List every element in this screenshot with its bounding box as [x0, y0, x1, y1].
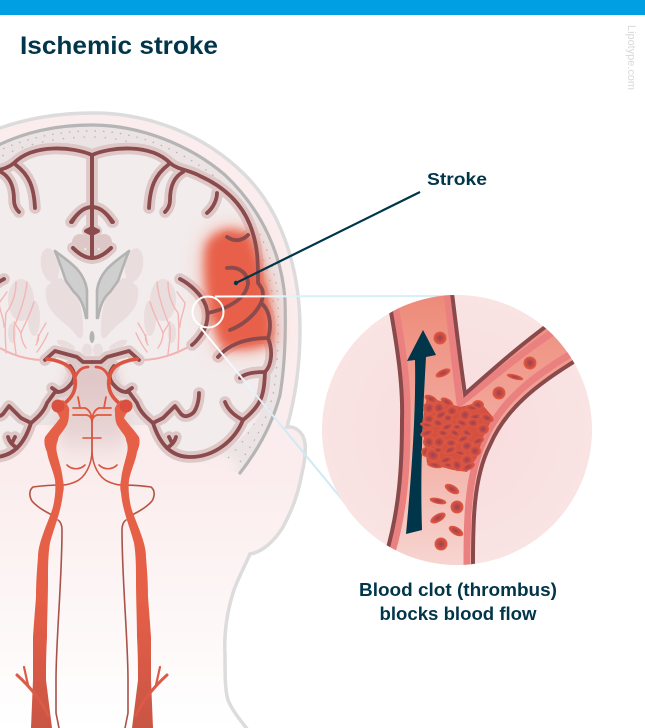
capillaries: [0, 282, 185, 355]
zoom connector lines: [200, 296, 450, 503]
stroke pointer: [234, 192, 420, 285]
dura speckle dots: [0, 131, 278, 462]
caption: blocks blood flow: [380, 604, 538, 624]
caption: Blood clot (thrombus): [359, 580, 557, 600]
head silhouette: [0, 113, 305, 728]
zoom circle on brain: [192, 296, 224, 328]
arc of lower brain: [0, 345, 192, 360]
basal ganglia and deep nuclei: [8, 247, 176, 356]
ventricles: [55, 251, 129, 343]
blood cells: [429, 332, 536, 550]
stroke label: Stroke: [427, 169, 487, 189]
title: Ischemic stroke: [20, 32, 218, 60]
brain tissue: [0, 146, 274, 461]
left carotid artery: [17, 400, 69, 728]
skull and dura: [0, 125, 285, 478]
blood clot: [419, 393, 495, 473]
detail disc: blood vessel: [322, 285, 592, 570]
stroke lesion: [199, 225, 278, 355]
blood flow arrow: [406, 330, 436, 534]
right carotid artery: [115, 400, 167, 728]
brainstem shading: [56, 362, 128, 475]
top bar: [0, 0, 645, 15]
gyri lines: [0, 148, 271, 457]
caption: [359, 580, 557, 624]
gyri halo: [0, 148, 271, 457]
intracranial arteries: [30, 359, 154, 728]
vessel lumen: [386, 285, 580, 570]
watermark: Lipotype.com: [625, 25, 637, 90]
vessel inner walls: [392, 285, 574, 570]
vessel outer walls: [386, 285, 580, 570]
